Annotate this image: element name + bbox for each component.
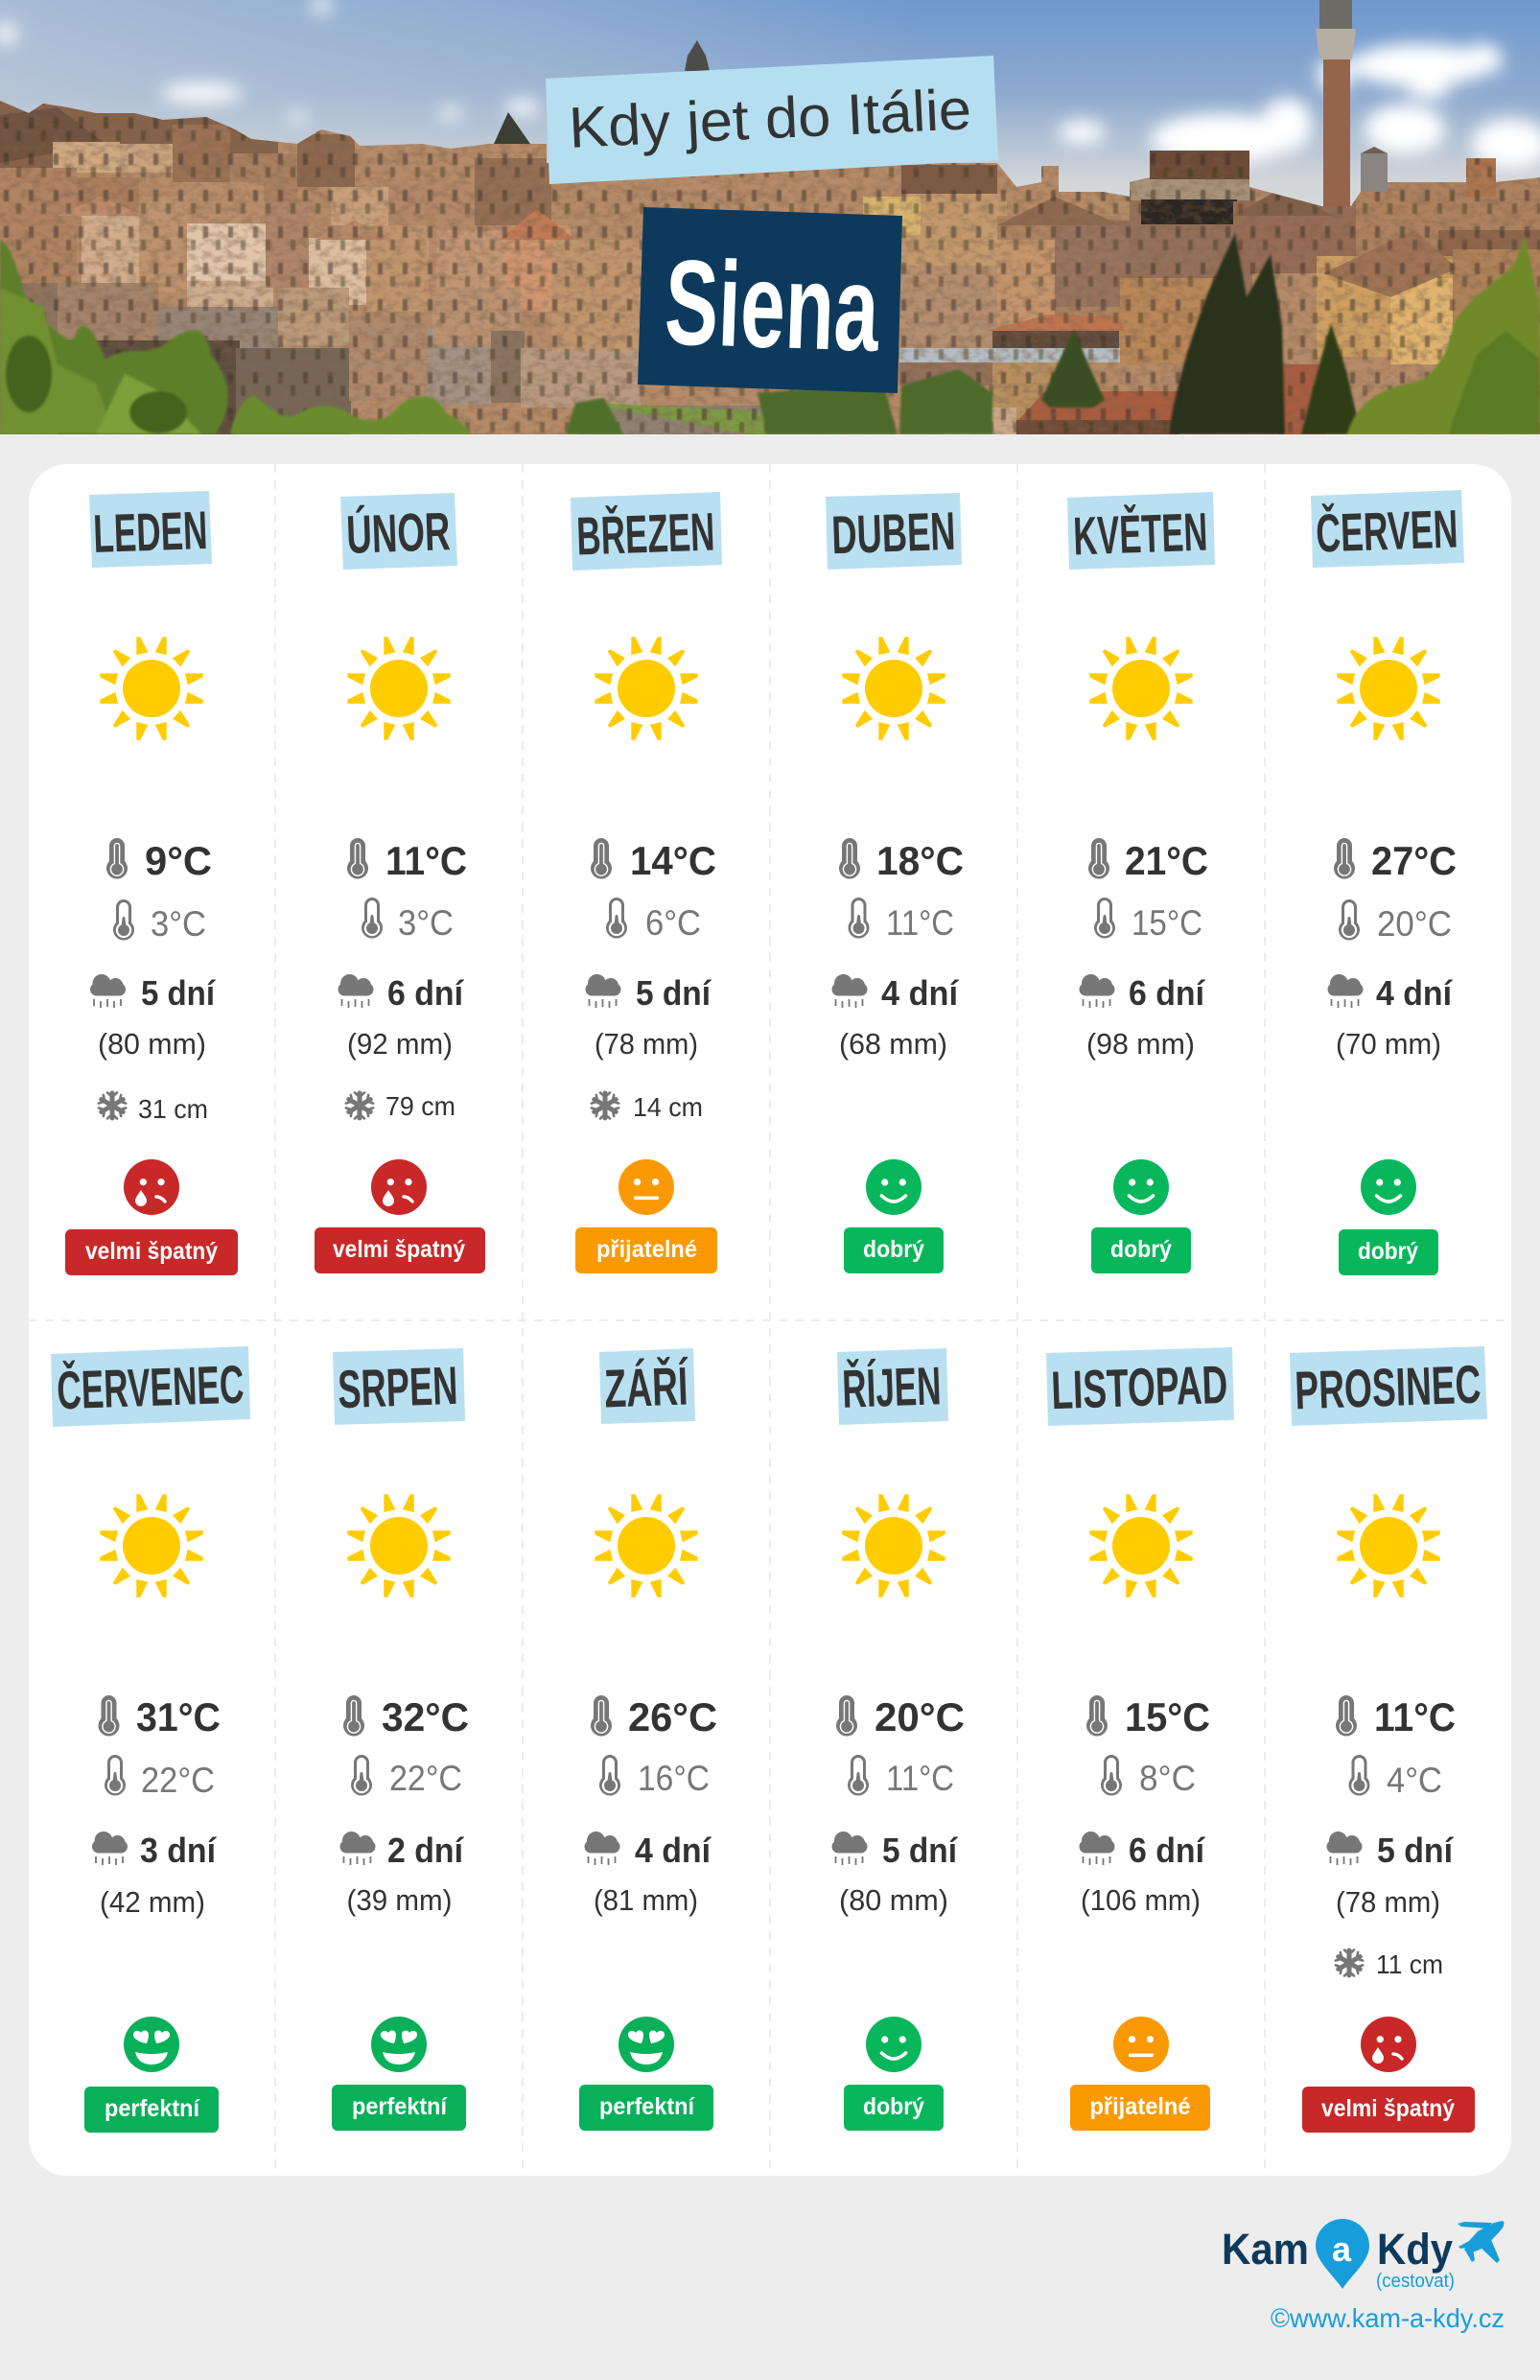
- max temperature: 11°C: [1374, 1694, 1456, 1739]
- rating badge: [844, 2085, 944, 2131]
- rating badge: perfektní: [105, 2095, 200, 2122]
- min temperature: [606, 898, 701, 943]
- max temperature: 15°C: [1125, 1694, 1210, 1739]
- icon: sun: [100, 1494, 203, 1598]
- rating badge: [84, 2087, 219, 2133]
- rain days: [585, 973, 712, 1013]
- rating badge: perfektní: [599, 2093, 695, 2120]
- rain days: [92, 1831, 217, 1870]
- rating badge: [1339, 1229, 1438, 1275]
- rating badge: [65, 1229, 238, 1275]
- min temperature: 20°C: [1377, 904, 1452, 944]
- heading: LISTOPAD: [1046, 1347, 1234, 1426]
- max temperature: [347, 838, 467, 883]
- heading: SRPEN: [333, 1348, 465, 1425]
- month: ZÁŘÍ: [579, 1348, 717, 2131]
- rainfall: (78 mm): [595, 1027, 698, 1061]
- heading: BŘEZEN: BŘEZEN: [575, 502, 715, 567]
- max temperature: [1086, 1694, 1210, 1739]
- rain days: [1327, 1831, 1454, 1870]
- rating badge: velmi špatný: [333, 1236, 465, 1263]
- min temperature: 3°C: [151, 904, 206, 944]
- heading: ÚNOR: [340, 493, 457, 570]
- rain days: 3 dní: [140, 1831, 217, 1870]
- max temperature: 27°C: [1371, 838, 1457, 883]
- max temperature: 21°C: [1125, 838, 1208, 883]
- icon: neutral face: [618, 1159, 674, 1215]
- heading: ZÁŘÍ: [599, 1348, 695, 1424]
- icon: smiling face: [866, 2017, 922, 2072]
- min temperature: [848, 898, 954, 943]
- icon: smiling face: [1113, 1159, 1169, 1215]
- icon: heart-eyes face: [124, 2017, 179, 2072]
- max temperature: [591, 838, 716, 883]
- heading: ČERVENEC: [51, 1346, 250, 1427]
- rating badge: [332, 2085, 466, 2131]
- rain days: [338, 973, 464, 1013]
- rainfall: (98 mm): [1086, 1027, 1195, 1061]
- rating badge: přijatelné: [596, 1236, 697, 1263]
- max temperature: 32°C: [382, 1694, 469, 1739]
- icon: smiling face: [866, 1159, 922, 1215]
- min temperature: [1348, 1755, 1442, 1800]
- city tag: Siena: [638, 207, 902, 393]
- rain days: [832, 973, 959, 1013]
- min temperature: 11°C: [886, 1759, 954, 1798]
- snowfall: [1336, 1949, 1443, 1979]
- month: BŘEZEN: [571, 492, 722, 1273]
- month: ČERVENEC: [51, 1346, 250, 2133]
- title tag: Kdy jet do Itálie: [546, 56, 998, 184]
- rainfall: (70 mm): [1336, 1027, 1441, 1061]
- icon: heart-eyes face: [371, 2017, 427, 2072]
- snowfall: [592, 1092, 703, 1122]
- rating badge: dobrý: [1358, 1238, 1418, 1265]
- icon: sun: [1089, 1494, 1193, 1598]
- icon: sun: [1337, 637, 1440, 740]
- rating badge: velmi špatný: [85, 1238, 218, 1265]
- rain days: 6 dní: [387, 973, 464, 1013]
- max temperature: 26°C: [628, 1694, 717, 1739]
- rain days: 5 dní: [882, 1831, 958, 1870]
- month: ŘÍJEN: [832, 1348, 965, 2131]
- snowfall: 11 cm: [1376, 1949, 1443, 1979]
- min temperature: [1339, 899, 1452, 944]
- rating badge: [1091, 1227, 1191, 1273]
- min temperature: 16°C: [638, 1759, 710, 1798]
- min temperature: 11°C: [886, 903, 954, 943]
- rainfall: (39 mm): [347, 1883, 453, 1917]
- max temperature: 9°C: [145, 838, 212, 883]
- rating badge: dobrý: [863, 2093, 924, 2120]
- month: KVĚTEN: [1067, 492, 1215, 1273]
- rain days: [339, 1831, 464, 1870]
- rain days: 2 dní: [387, 1831, 464, 1870]
- rating badge: dobrý: [1110, 1236, 1172, 1263]
- min temperature: 15°C: [1132, 903, 1202, 943]
- icon: sun: [100, 637, 203, 740]
- heading: BŘEZEN: [571, 492, 722, 571]
- icon: airplane: [1458, 2221, 1504, 2263]
- heading: ČERVENEC: ČERVENEC: [56, 1354, 245, 1420]
- rain days: 5 dní: [141, 973, 216, 1013]
- website credit: ©www.kam-a-kdy.cz: [1271, 2303, 1505, 2333]
- heading: KVĚTEN: KVĚTEN: [1072, 502, 1208, 566]
- max temperature: [106, 838, 212, 883]
- month: PROSINEC: [1290, 1346, 1487, 2133]
- rain days: 6 dní: [1129, 1831, 1205, 1870]
- month: ČERVEN: [1311, 490, 1464, 1275]
- rain days: 5 dní: [1377, 1831, 1454, 1870]
- rating badge: [1070, 2085, 1210, 2131]
- min temperature: 4°C: [1387, 1761, 1442, 1800]
- rainfall: (81 mm): [594, 1883, 698, 1917]
- rating badge: velmi špatný: [1321, 2095, 1455, 2122]
- max temperature: [98, 1694, 221, 1739]
- icon: sun: [1089, 637, 1193, 740]
- min temperature: [113, 899, 206, 944]
- min temperature: 8°C: [1139, 1759, 1196, 1798]
- icon: sun: [595, 1494, 698, 1598]
- month: DUBEN: [826, 493, 964, 1273]
- heading: LEDEN: [89, 491, 212, 568]
- min temperature: [362, 898, 454, 943]
- rainfall: (78 mm): [1336, 1885, 1440, 1919]
- max temperature: [1336, 1694, 1456, 1739]
- heading: SRPEN: SRPEN: [337, 1355, 458, 1419]
- heading: PROSINEC: [1290, 1346, 1487, 1426]
- icon: sun: [842, 1494, 945, 1598]
- heading: DUBEN: [826, 493, 962, 570]
- city mass: [0, 96, 1540, 434]
- heading: ŘÍJEN: ŘÍJEN: [841, 1355, 942, 1419]
- max temperature: 31°C: [136, 1694, 221, 1739]
- rainfall: (80 mm): [839, 1883, 948, 1917]
- icon: map pin with a: [1316, 2219, 1369, 2289]
- rating badge: [575, 1227, 717, 1273]
- logo subtitle: (cestovat): [1376, 2271, 1455, 2292]
- snowfall: [99, 1093, 208, 1124]
- min temperature: 6°C: [645, 903, 701, 943]
- rain days: [1080, 973, 1205, 1013]
- min temperature: [351, 1755, 462, 1798]
- icon: crying face: [124, 1159, 179, 1215]
- min temperature: [105, 1755, 215, 1800]
- heading: KVĚTEN: [1067, 492, 1215, 570]
- header photo: Siena skyline: [0, 0, 1540, 434]
- snowfall: 79 cm: [385, 1091, 455, 1121]
- rainfall: (106 mm): [1081, 1883, 1201, 1917]
- heading: DUBEN: DUBEN: [830, 501, 956, 565]
- rain days: [832, 1831, 958, 1870]
- icon: crying face: [1361, 2017, 1416, 2072]
- icon: heart-eyes face: [618, 2017, 674, 2072]
- distant towers: [685, 40, 710, 71]
- icon: sun: [842, 637, 945, 740]
- heading: ÚNOR: ÚNOR: [345, 501, 451, 565]
- max temperature: 11°C: [385, 838, 467, 883]
- icon: smiling face: [1361, 1159, 1416, 1215]
- heading: ČERVEN: ČERVEN: [1315, 498, 1458, 564]
- icon: sun: [347, 637, 451, 740]
- max temperature: [343, 1694, 469, 1739]
- min temperature: 22°C: [141, 1761, 215, 1800]
- trees and foliage: [0, 233, 1540, 434]
- snowfall: 31 cm: [138, 1094, 208, 1124]
- rain days: 4 dní: [635, 1831, 712, 1870]
- min temperature: [1094, 898, 1202, 943]
- snowfall: 14 cm: [633, 1092, 703, 1122]
- rainfall: (42 mm): [100, 1885, 205, 1919]
- rainfall: (68 mm): [839, 1027, 947, 1061]
- rating badge: [844, 1227, 944, 1273]
- icon: neutral face: [1113, 2017, 1169, 2072]
- min temperature: [848, 1755, 954, 1798]
- rainfall: (92 mm): [347, 1027, 453, 1061]
- logo word: Kam: Kam: [1222, 2225, 1309, 2274]
- icon: sun: [1337, 1494, 1440, 1598]
- heading: ZÁŘÍ: ZÁŘÍ: [603, 1355, 689, 1419]
- month: ÚNOR: [315, 493, 485, 1273]
- snowfall: [346, 1091, 455, 1121]
- rating badge: [315, 1227, 485, 1273]
- month: LISTOPAD: [1046, 1347, 1234, 2131]
- icon: sun: [347, 1494, 451, 1598]
- rating badge: [1302, 2087, 1475, 2133]
- icon: crying face: [371, 1159, 427, 1215]
- rain days: 5 dní: [636, 973, 712, 1013]
- month: LEDEN: [65, 491, 238, 1275]
- heading: ČERVEN: [1311, 490, 1464, 568]
- rating badge: dobrý: [863, 1236, 924, 1263]
- rainfall: (80 mm): [98, 1027, 206, 1061]
- heading: LISTOPAD: LISTOPAD: [1050, 1354, 1228, 1420]
- rain days: [90, 973, 216, 1013]
- max temperature: [1334, 838, 1457, 883]
- rating badge: přijatelné: [1089, 2093, 1191, 2120]
- min temperature: [1101, 1755, 1196, 1798]
- logo word: Kdy: Kdy: [1377, 2225, 1453, 2274]
- logo: Kam a Kdy: [1222, 2219, 1504, 2292]
- max temperature: 14°C: [630, 838, 716, 883]
- icon: sun: [595, 637, 698, 740]
- rain days: 4 dní: [1376, 973, 1453, 1013]
- icon: map pin with a: a: [1332, 2229, 1352, 2269]
- rain days: 4 dní: [881, 973, 959, 1013]
- city tag: Siena: Siena: [663, 234, 882, 377]
- rain days: [1080, 1831, 1205, 1870]
- rating badge: [579, 2085, 713, 2131]
- rain days: [585, 1831, 712, 1870]
- min temperature: [599, 1755, 710, 1798]
- rating badge: perfektní: [352, 2093, 448, 2120]
- panel: months card: [29, 464, 1511, 2176]
- max temperature: [1088, 838, 1208, 883]
- heading: ŘÍJEN: [837, 1348, 948, 1425]
- min temperature: 22°C: [389, 1759, 462, 1798]
- title tag: Kdy jet do Itálie: Kdy jet do Itálie: [568, 77, 972, 160]
- max temperature: 18°C: [876, 838, 964, 883]
- heading: LEDEN: LEDEN: [92, 500, 208, 564]
- rain days: 6 dní: [1129, 973, 1205, 1013]
- max temperature: 20°C: [875, 1694, 965, 1739]
- month: SRPEN: [332, 1348, 469, 2131]
- rain days: [1327, 973, 1453, 1013]
- max temperature: [839, 838, 964, 883]
- min temperature: 3°C: [398, 903, 454, 943]
